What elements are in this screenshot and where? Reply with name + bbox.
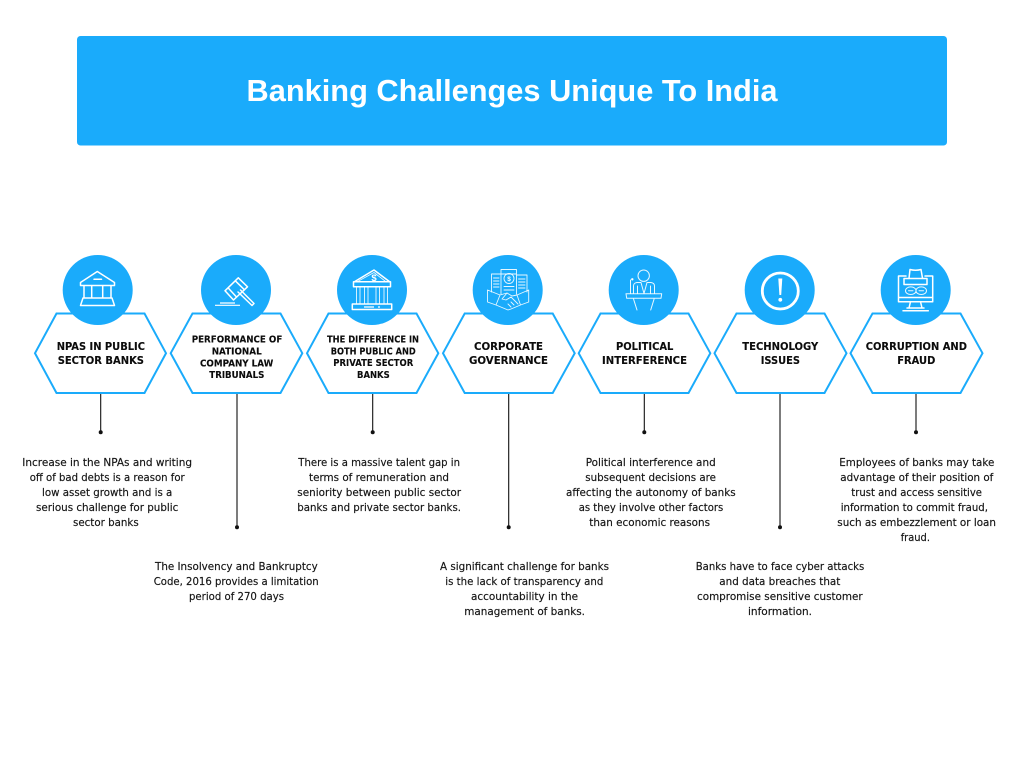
heading: ISSUES (761, 355, 800, 367)
description: sector banks (73, 517, 139, 529)
description (154, 561, 319, 603)
icon circle: speaker at podium (609, 255, 679, 325)
connector (235, 394, 239, 529)
heading: PRIVATE SECTOR (333, 358, 414, 369)
connector (778, 394, 782, 529)
heading: BANKS (357, 370, 390, 381)
panel: political interference (566, 255, 736, 529)
description: management of banks. (464, 606, 585, 618)
description: Code, 2016 provides a limitation (154, 576, 319, 588)
connector (642, 394, 646, 434)
description (22, 457, 192, 529)
description: affecting the autonomy of banks (566, 487, 736, 499)
heading: COMPANY LAW (200, 358, 274, 369)
heading (327, 335, 419, 381)
icon circle: buildings and handshake: $ (507, 276, 511, 283)
description: advantage of their position of (840, 472, 994, 484)
description: information to commit fraud, (841, 502, 988, 514)
heading (742, 341, 819, 367)
description (297, 457, 462, 514)
description: period of 270 days (189, 591, 284, 603)
description (696, 561, 864, 618)
description: serious challenge for public (36, 502, 178, 514)
description: compromise sensitive customer (697, 591, 863, 603)
heading: FRAUD (897, 355, 936, 367)
description: such as embezzlement or loan (837, 517, 996, 529)
description: than economic reasons (589, 517, 710, 529)
panel: performance of national company law tribunals (154, 255, 319, 603)
description: Increase in the NPAs and writing (22, 457, 192, 469)
description: A significant challenge for banks (440, 561, 609, 573)
panel: corruption and fraud (837, 255, 996, 544)
heading (469, 341, 548, 367)
panel: technology issues (696, 255, 864, 618)
heading (866, 341, 967, 367)
heading: TECHNOLOGY (742, 341, 819, 353)
heading: NATIONAL (212, 346, 262, 357)
connector (914, 394, 918, 434)
description: low asset growth and is a (42, 487, 172, 499)
icon circle: exclamation (745, 255, 815, 325)
panel: corporate governance (440, 255, 609, 618)
icon circle: hacker at monitor (881, 255, 951, 325)
description: The Insolvency and Bankruptcy (154, 561, 318, 573)
connector (507, 394, 511, 529)
heading (192, 335, 282, 381)
description: is the lack of transparency and (445, 576, 603, 588)
heading: GOVERNANCE (469, 355, 548, 367)
icon circle: classical bank (63, 255, 133, 325)
description: terms of remuneration and (309, 472, 449, 484)
title: Banking Challenges Unique To India (246, 73, 778, 108)
description: seniority between public sector (297, 487, 462, 499)
heading (57, 341, 145, 367)
description (566, 457, 736, 529)
heading: POLITICAL (616, 341, 674, 353)
heading: THE DIFFERENCE IN (327, 335, 419, 346)
description: information. (748, 606, 812, 618)
icon circle: buildings and handshake (473, 255, 543, 325)
panel: difference in public and private sector banks (297, 255, 462, 514)
connector (371, 394, 375, 434)
description: banks and private sector banks. (297, 502, 461, 514)
description: Employees of banks may take (839, 457, 994, 469)
description: and data breaches that (719, 576, 840, 588)
heading: PERFORMANCE OF (192, 335, 282, 346)
dollar sign: $ (371, 273, 377, 284)
panel: NPAs in public sector banks (22, 255, 192, 529)
connector (99, 394, 103, 434)
description: off of bad debts is a reason for (30, 472, 185, 484)
description: Political interference and (586, 457, 716, 469)
description: There is a massive talent gap in (297, 457, 460, 469)
heading: CORRUPTION AND (866, 341, 967, 353)
description (837, 457, 996, 544)
description: trust and access sensitive (851, 487, 982, 499)
heading: TRIBUNALS (209, 370, 264, 381)
heading: INTERFERENCE (602, 355, 687, 367)
heading (602, 341, 687, 367)
title banner (77, 36, 947, 146)
icon circle: bank with dollar (337, 255, 407, 325)
description: subsequent decisions are (585, 472, 716, 484)
heading: CORPORATE (474, 341, 543, 353)
heading: SECTOR BANKS (58, 355, 144, 367)
heading: NPAS IN PUBLIC (57, 341, 145, 353)
description: Banks have to face cyber attacks (696, 561, 864, 573)
heading: BOTH PUBLIC AND (331, 346, 416, 357)
icon circle: gavel (201, 255, 271, 325)
description: fraud. (901, 532, 930, 544)
description: accountability in the (471, 591, 578, 603)
description: as they involve other factors (579, 502, 723, 514)
description (440, 561, 609, 618)
